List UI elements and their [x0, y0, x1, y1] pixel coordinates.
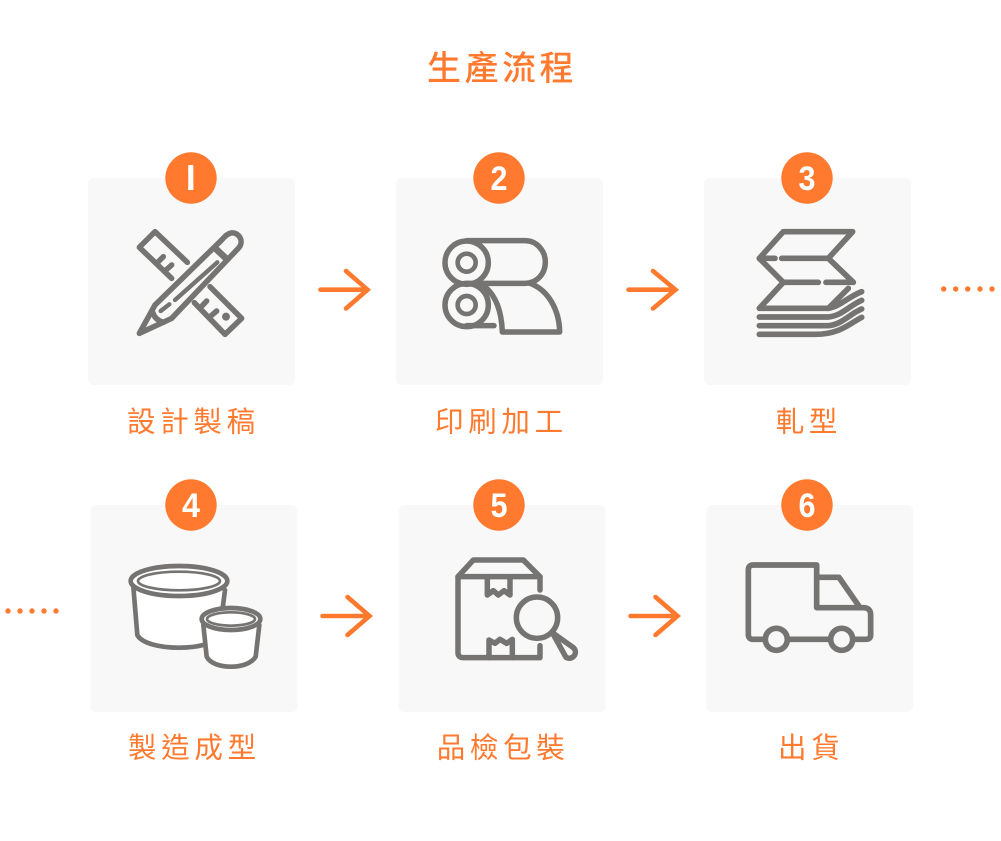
number badge 6: 6: [798, 487, 816, 525]
label: 設計製稿: [127, 406, 260, 438]
arrow 5 to 6: [630, 597, 678, 635]
number badge 1: 1: [181, 160, 199, 198]
number badge 4: [165, 479, 217, 531]
number badge 2: [473, 152, 525, 204]
icon: folded paper stack: [759, 232, 862, 334]
panel: step 3 die-cutting: [704, 152, 911, 439]
number badge 1: [165, 152, 217, 204]
arrow 2 to 3: [628, 271, 676, 308]
number badge 3: [781, 152, 833, 204]
title: 生產流程: [427, 50, 577, 88]
number badge 5: [473, 479, 525, 531]
panel: step 1 design: [128, 152, 254, 434]
card: [396, 178, 603, 385]
icon: paper rolls: [445, 241, 560, 332]
number badge 3: 3: [798, 160, 816, 198]
arrow 1 to 2: [320, 271, 368, 308]
icon: delivery truck: [748, 565, 871, 650]
panel: step 6 shipping: [706, 479, 913, 764]
icon: pencil and ruler: [139, 232, 242, 334]
icon: box and magnifier: [458, 560, 575, 658]
number badge 2: 2: [490, 160, 508, 198]
card: [398, 505, 606, 712]
continuation dots left: [5, 608, 59, 614]
card: [88, 178, 295, 385]
icon: paper cups: [131, 566, 260, 667]
number badge 4: 4: [182, 487, 200, 525]
label: 軋型: [776, 406, 842, 438]
panel: step 2 printing: [396, 152, 603, 439]
label: 製造成型: [128, 732, 261, 764]
arrow 4 to 5: [322, 597, 370, 635]
card: [706, 505, 913, 712]
label: 出貨: [778, 732, 844, 764]
panel: step 4 forming: [90, 479, 298, 764]
number badge 6: [781, 479, 833, 531]
card: [704, 178, 911, 385]
panel: step 5 inspection and packing: [398, 479, 606, 764]
continuation dots right: [941, 286, 995, 292]
label: 印刷加工: [435, 406, 568, 438]
card: [90, 505, 298, 712]
number badge 5: 5: [490, 487, 508, 525]
label: 品檢包裝: [437, 732, 570, 764]
